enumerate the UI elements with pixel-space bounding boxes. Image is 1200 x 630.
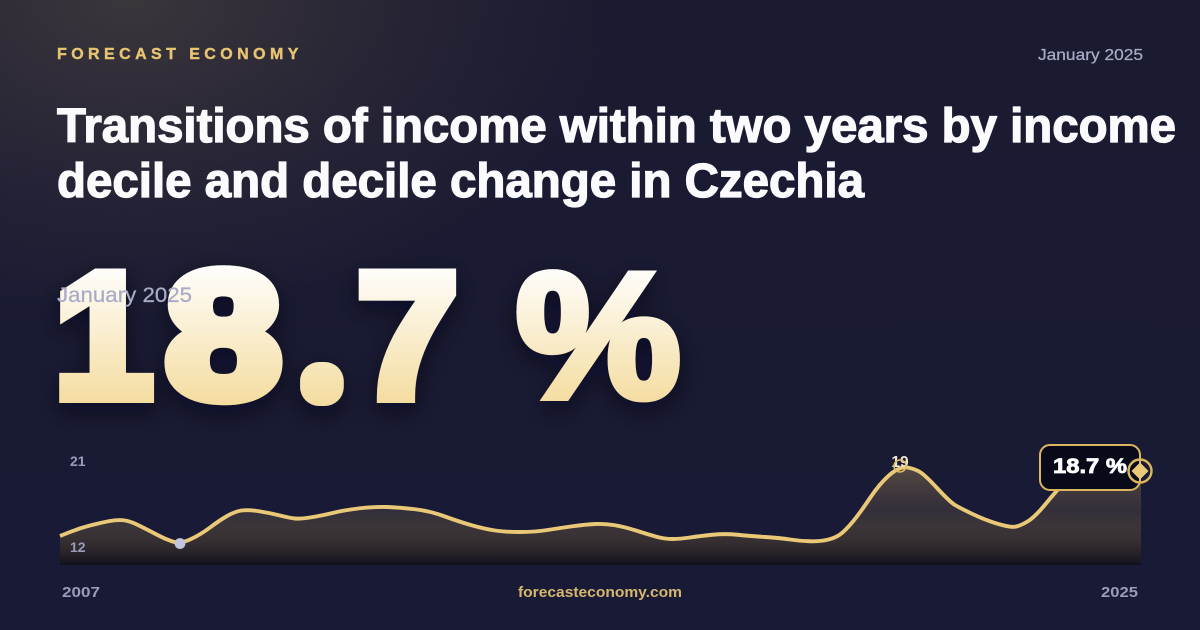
big value: 7 <box>357 237 458 436</box>
big value: . <box>316 352 328 396</box>
source website: forecasteconomy.com <box>518 584 682 601</box>
title <box>57 100 1176 208</box>
end point marker <box>1128 460 1152 482</box>
title: decile and decile change in Czechia <box>57 155 864 208</box>
big value: 1 <box>54 236 153 435</box>
y-axis max label: 21 <box>70 453 86 469</box>
line <box>60 467 1065 542</box>
end year label: 2025 <box>1101 584 1138 601</box>
peak marker <box>894 460 906 472</box>
area under line <box>60 467 1141 565</box>
current value callout: 18.7 % <box>1053 454 1127 478</box>
low point marker <box>175 538 185 549</box>
start year label: 2007 <box>62 584 100 601</box>
sparkline chart <box>60 453 1141 565</box>
date label overlapping value: January 2025 <box>57 284 192 307</box>
big value: % <box>516 237 681 435</box>
big value: 8 <box>166 235 281 434</box>
brand label: FORECAST ECONOMY <box>57 46 303 63</box>
date label top right: January 2025 <box>1038 47 1143 64</box>
big value <box>54 235 681 436</box>
peak label: 19 <box>891 454 909 471</box>
title: Transitions of income within two years by income <box>57 100 1176 153</box>
current value callout <box>1040 445 1152 490</box>
y-axis min label: 12 <box>70 539 86 555</box>
